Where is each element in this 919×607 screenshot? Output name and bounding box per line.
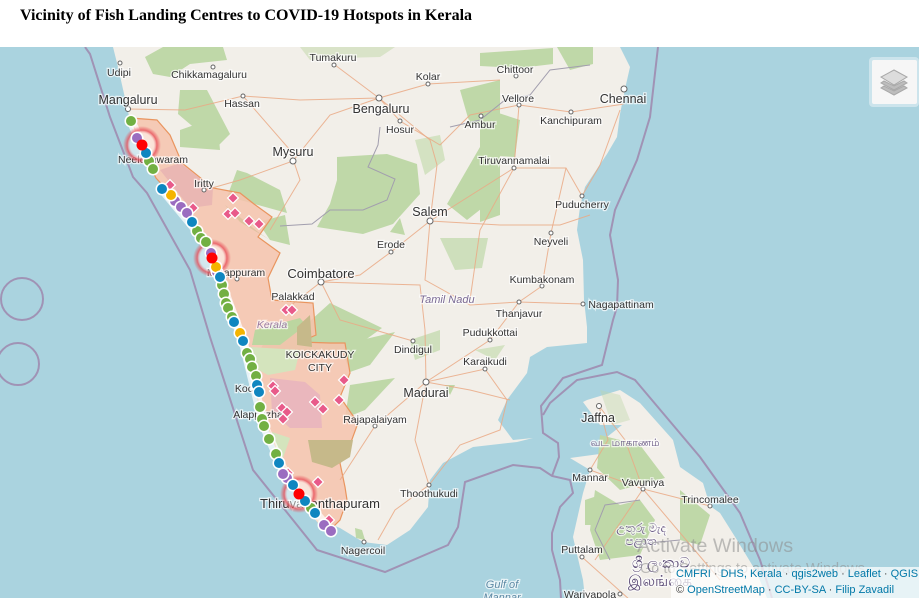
place labels: Thanjavur — [496, 308, 543, 320]
place labels: Thoothukudi — [400, 488, 458, 500]
place labels: CITY — [308, 362, 332, 374]
place labels: Salem — [412, 205, 448, 219]
place labels: இலங்கை — [628, 573, 692, 590]
city dots — [118, 61, 712, 596]
place labels: Kolar — [416, 71, 441, 83]
place labels: Mangaluru — [98, 93, 158, 107]
attribution: CMFRI · DHS, Kerala · qgis2web · Leaflet · QGIS — [676, 568, 918, 580]
place labels: Tiruvannamalai — [478, 155, 550, 167]
hotspot centres — [136, 140, 304, 500]
place labels: Rajapalaiyam — [343, 414, 407, 426]
state boundaries — [280, 65, 680, 560]
place labels: Neeleshwaram — [118, 154, 188, 166]
place labels: Bengaluru — [352, 102, 410, 116]
place labels: Coimbatore — [287, 266, 355, 281]
watermark — [637, 535, 865, 577]
place labels: Alappuzha — [233, 409, 283, 421]
place labels: Tamil Nadu — [419, 294, 475, 306]
place labels: வட மாகாணம் — [590, 437, 660, 449]
place labels: පළාත — [626, 534, 657, 549]
place labels: Pudukkottai — [463, 327, 517, 339]
place labels: Thiruvananthapuram — [260, 496, 380, 511]
place labels: Erode — [377, 239, 405, 251]
place labels: Vavuniya — [622, 477, 664, 489]
place labels: Vellore — [502, 93, 534, 105]
place labels: Puducherry — [555, 199, 610, 211]
place labels: Mannar — [483, 592, 522, 604]
place labels: Nagapattinam — [588, 299, 654, 311]
place labels: Kochi — [235, 383, 261, 395]
place labels: Udipi — [107, 67, 131, 79]
place labels: Kumbakonam — [510, 274, 575, 286]
pink diamond markers — [166, 180, 348, 524]
place labels: Hassan — [224, 98, 260, 110]
place labels: උතුරු මැද — [616, 521, 666, 536]
white halo trail along the coast — [131, 121, 331, 531]
place labels: Kanchipuram — [540, 115, 602, 127]
place labels — [98, 52, 739, 604]
place labels: Chikkamagaluru — [171, 69, 247, 81]
place labels: Chennai — [600, 92, 646, 106]
layers control — [869, 57, 919, 107]
maritime boundaries — [0, 47, 772, 599]
place labels: Nagercoil — [341, 545, 385, 557]
icon: layers — [881, 70, 907, 95]
place labels: Puttalam — [561, 544, 603, 556]
hotspot halos — [123, 126, 318, 513]
place labels: Mysuru — [273, 145, 314, 159]
place labels: Mannar — [572, 472, 608, 484]
fish landing centre markers — [126, 116, 336, 536]
place labels: Neyveli — [534, 236, 568, 248]
forest patches — [145, 47, 710, 560]
watermark: Activate Windows — [637, 535, 793, 557]
place labels: Kerala — [257, 319, 287, 331]
attribution — [671, 567, 919, 598]
place labels: Ambur — [465, 119, 496, 131]
place labels: Palakkad — [271, 291, 315, 303]
attribution: © OpenStreetMap · CC-BY-SA · Filip Zavadil — [676, 584, 894, 596]
land: Sri Lanka — [570, 390, 767, 598]
place labels: Jaffna — [581, 411, 615, 425]
place labels: Dindigul — [394, 344, 432, 356]
place labels: Tumakuru — [310, 52, 357, 64]
place labels: Madurai — [403, 386, 449, 400]
place labels: KOICKAKUDY — [286, 349, 354, 361]
watermark: Go to Settings to activate Windows — [640, 561, 865, 577]
Kerala districts overlay — [131, 118, 358, 530]
place labels: Karaikudi — [463, 356, 507, 368]
title: Vicinity of Fish Landing Centres to COVID-19 Hotspots in Kerala — [20, 7, 472, 24]
place labels: Wariyapola — [564, 589, 616, 601]
place labels: Gulf of — [486, 579, 519, 591]
place labels: Malappuram — [207, 267, 265, 279]
place labels: Iritty — [194, 178, 215, 190]
place labels: ශ්‍රී ලංකාව — [632, 555, 690, 572]
place labels: Hosur — [386, 124, 415, 136]
roads — [128, 65, 720, 600]
place labels: Chittoor — [497, 64, 534, 76]
place labels: Trincomalee — [681, 494, 739, 506]
land: India — [113, 47, 630, 545]
